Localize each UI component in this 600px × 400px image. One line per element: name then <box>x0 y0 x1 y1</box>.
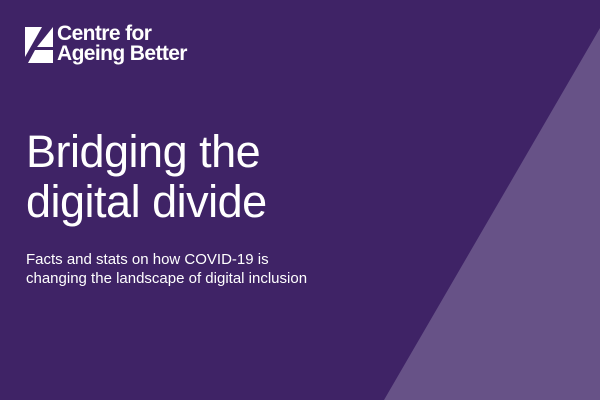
subtitle: changing the landscape of digital inclusion <box>26 270 307 287</box>
icon: logo mark <box>25 27 53 63</box>
title: Bridging the <box>26 126 260 177</box>
title <box>26 126 267 227</box>
logo <box>25 22 188 65</box>
logo text: Centre for <box>57 22 151 45</box>
logo text <box>57 22 188 65</box>
subtitle <box>26 251 307 287</box>
title: digital divide <box>26 176 267 227</box>
logo text: Ageing Better <box>57 42 187 65</box>
subtitle: Facts and stats on how COVID-19 is <box>26 251 269 268</box>
